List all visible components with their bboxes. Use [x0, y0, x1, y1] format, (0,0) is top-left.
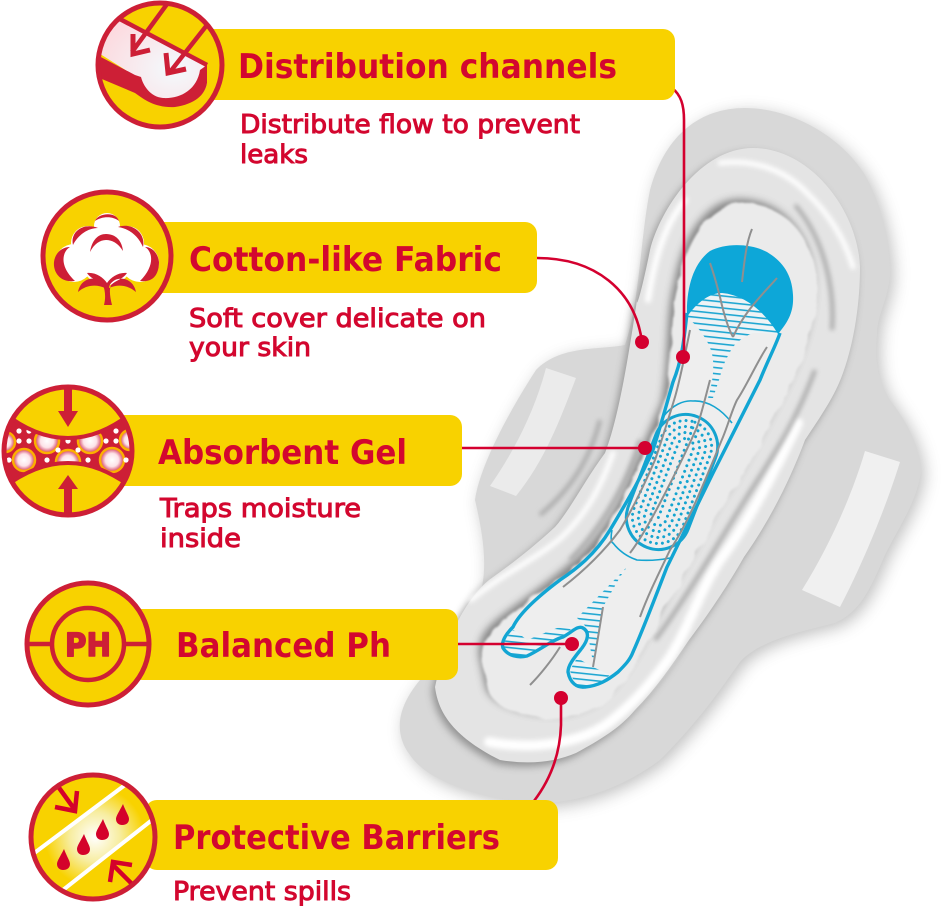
icon: gel core — [0, 380, 140, 520]
label bar — [145, 800, 558, 870]
panel: Protective Barriers — [31, 775, 558, 907]
connector: Protective Barriers — [534, 691, 568, 801]
heading: Distribution channels — [238, 47, 617, 87]
icon: pH badge: PH — [65, 626, 111, 664]
panel: Balanced Ph — [27, 583, 458, 705]
connector: Distribution channels — [672, 88, 690, 364]
heading: Balanced Ph — [176, 626, 391, 666]
description: your skin — [189, 333, 311, 363]
grey groove lines — [530, 229, 777, 685]
description: Distribute flow to prevent — [240, 110, 580, 140]
icon: cotton boll — [43, 192, 171, 320]
red crescents — [54, 214, 159, 281]
connector: Absorbent Gel — [460, 441, 652, 455]
label bar — [130, 609, 458, 680]
icon: barrier with drops — [31, 775, 155, 899]
grey contour on ring — [540, 205, 833, 640]
hatched left tip — [503, 627, 573, 657]
panel: Absorbent Gel — [0, 380, 462, 554]
panel: sanitary pad illustration — [400, 108, 925, 807]
heading: Cotton-like Fabric — [189, 240, 502, 280]
hatched lower stem — [577, 567, 627, 664]
description: Prevent spills — [173, 877, 351, 907]
hatched central zone — [687, 293, 778, 398]
centre quilted area — [479, 199, 814, 715]
bright ridges — [471, 162, 853, 745]
description — [159, 494, 361, 554]
connector: Cotton-like Fabric — [537, 258, 649, 349]
wing tape left — [490, 368, 576, 496]
heading: Protective Barriers — [173, 818, 500, 858]
connector: Balanced Ph — [457, 637, 579, 651]
channel interior — [502, 313, 780, 687]
heading: Absorbent Gel — [158, 433, 407, 473]
description: inside — [160, 524, 241, 554]
hatched right tip — [570, 658, 610, 687]
description: Soft cover delicate on — [189, 304, 486, 334]
icon: pH badge — [27, 583, 149, 705]
white lobes — [55, 213, 159, 285]
wing tape right — [802, 451, 900, 607]
panel: Cotton-like Fabric — [43, 192, 537, 363]
channel shapes — [502, 229, 793, 687]
plant — [78, 273, 136, 305]
description: Traps moisture — [159, 494, 361, 524]
icon: channel cross-section — [97, 0, 222, 127]
panel: Distribution channels — [97, 0, 675, 170]
label bar — [100, 415, 462, 486]
blue top cap — [687, 245, 793, 334]
description — [189, 304, 486, 363]
absorbent gel dot zone — [611, 401, 732, 560]
blood drops — [57, 804, 129, 870]
description — [240, 110, 580, 170]
blue channel outline — [502, 313, 780, 687]
outer cushion shading — [432, 152, 857, 766]
label bar — [140, 222, 537, 293]
label bar — [190, 29, 675, 100]
description: leaks — [240, 140, 308, 170]
